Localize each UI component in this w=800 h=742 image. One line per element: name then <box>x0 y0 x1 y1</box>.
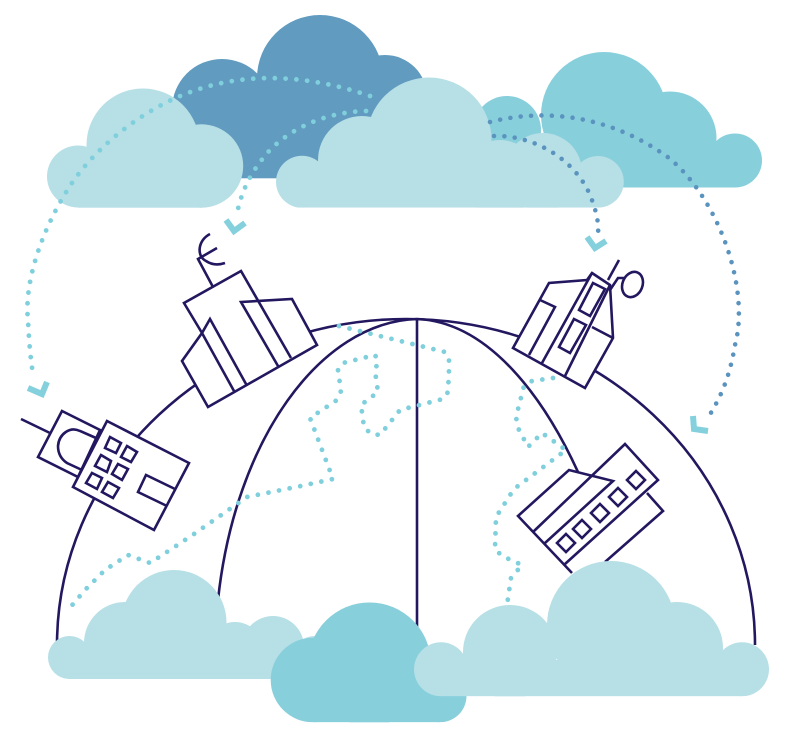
dotted link: far right to teal cloud <box>490 115 739 416</box>
arrowhead: upper left <box>226 220 245 231</box>
building: lower right <box>518 444 663 573</box>
arrowhead: far left <box>28 382 47 394</box>
top cloud: light left <box>47 88 243 208</box>
globe dome <box>57 319 755 645</box>
dotted link: left building to dark cloud <box>238 111 366 209</box>
bottom cloud: light right <box>414 561 769 699</box>
building: upper left <box>182 234 317 407</box>
top cloud: light centre <box>276 78 624 216</box>
top cloud: dark blue <box>172 15 427 178</box>
map: right continent dotted outline <box>495 378 566 605</box>
building: upper right <box>513 260 647 388</box>
arrowhead: upper right <box>587 237 606 248</box>
bottom cloud: light left <box>48 570 315 679</box>
dotted link: far left building to dark cloud <box>27 78 370 374</box>
map: left continent dotted outline <box>68 326 449 610</box>
dotted link: right building to teal cloud <box>494 136 598 234</box>
bottom cloud: teal centre <box>271 602 466 726</box>
top cloud: teal <box>473 52 762 188</box>
arrowhead: far right <box>693 416 708 431</box>
building: far left <box>21 411 189 530</box>
